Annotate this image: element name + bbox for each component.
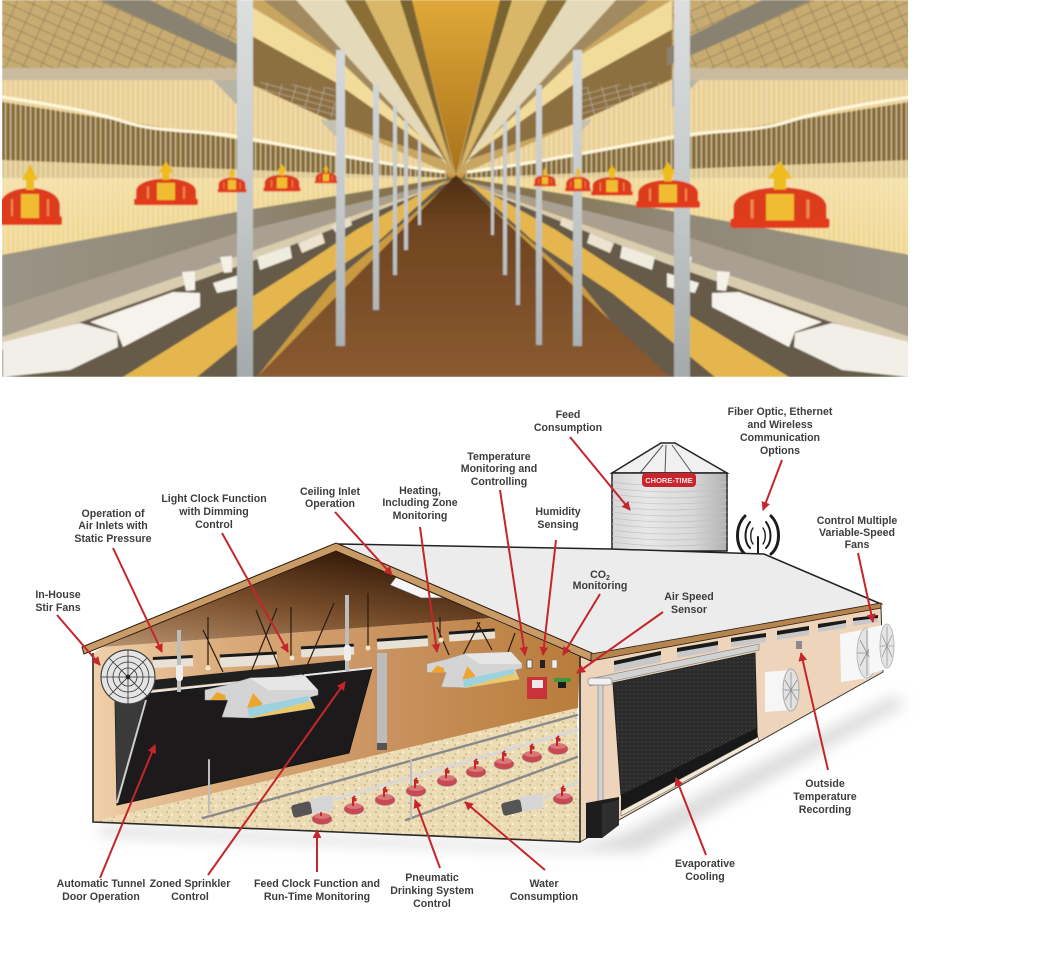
label: heating: Including Zone (382, 497, 458, 509)
label: ceiling inlet: Operation (305, 498, 355, 510)
photo: interior of poultry cage house (0, 0, 910, 377)
label: humidity sensing: Humidity (535, 506, 581, 518)
label: variable-speed fans: Variable-Speed (819, 527, 895, 539)
arrow: air speed (577, 612, 663, 673)
photo: left cage tiers (2, 0, 456, 377)
label: air inlets: Static Pressure (74, 533, 152, 545)
label: heating: Heating, (399, 485, 441, 497)
drinking and feed lines (203, 715, 577, 820)
label: heating: Monitoring (393, 510, 447, 522)
label: feed clock: Feed Clock Function and (254, 878, 380, 890)
evaporative cooling pad (613, 653, 757, 795)
arrow: evaporative cooling (676, 778, 706, 855)
arrow: outside temperature (801, 653, 828, 770)
label: CO2 monitoring: Monitoring (573, 580, 627, 592)
label: air inlets: Operation of (82, 508, 145, 520)
label: light clock: with Dimming (178, 506, 249, 518)
arrow: temperature (500, 490, 525, 655)
label: communication options: Fiber Optic, Ethernet (728, 406, 833, 418)
silo (612, 443, 727, 551)
arrow: zoned sprinkler (208, 682, 345, 875)
label: outside temperature: Outside (805, 778, 845, 790)
feed motor right (501, 793, 544, 816)
CO2 sensor module (554, 678, 571, 688)
label: pneumatic drinking: Control (413, 898, 451, 910)
arrow: pneumatic drinking (415, 800, 440, 868)
label: zoned sprinkler: Zoned Sprinkler (150, 878, 230, 890)
roof (338, 544, 881, 656)
back wall interior (93, 618, 580, 822)
arrow: communication (763, 460, 782, 510)
label: humidity sensing: Sensing (537, 519, 579, 531)
water box (586, 797, 619, 838)
label: pneumatic drinking: Drinking System (390, 885, 474, 897)
label: in-house stir fans: In-House (35, 589, 81, 601)
label: outside temperature: Temperature (793, 791, 857, 803)
silo logo: CHORE-TIME (645, 476, 693, 485)
arrow: tunnel door (100, 745, 155, 878)
arrow: humidity (543, 540, 556, 655)
label: ceiling inlet: Ceiling Inlet (300, 486, 360, 498)
house outlines (93, 653, 580, 842)
photo: brown floor aisle (257, 175, 670, 377)
arrow: ceiling inlet (335, 512, 392, 575)
arrow: heating (420, 527, 437, 652)
photo: red feeder pans (0, 161, 830, 228)
gable trim (82, 543, 592, 661)
curtain corner folds (115, 693, 146, 805)
tunnel door opening (115, 660, 372, 805)
icon: in-house stir fan (101, 650, 155, 704)
eave trim (591, 603, 881, 661)
label: communication options: Communication (740, 432, 820, 444)
label: light clock: Control (195, 519, 233, 531)
photo: vertical steel posts (237, 0, 690, 377)
label: CO2 monitoring: 2 (606, 575, 610, 582)
label: zoned sprinkler: Control (171, 891, 209, 903)
arrow: CO2 (563, 594, 600, 655)
label: temperature monitoring: Monitoring and (461, 463, 537, 475)
heater front (205, 676, 318, 718)
pad sill (621, 737, 759, 816)
photo: right cage tiers (456, 0, 910, 377)
label: feed clock: Run-Time Monitoring (264, 891, 370, 903)
tunnel fan far (868, 624, 894, 674)
label: CO2 monitoring: CO (590, 569, 606, 581)
tunnel fan large (840, 628, 877, 682)
label: feed consumption: Feed (556, 409, 580, 421)
label: variable-speed fans: Control Multiple (817, 515, 897, 527)
arrow: light clock (222, 533, 288, 652)
arrow: air inlets (113, 548, 162, 652)
arrow: in-house stir fans (57, 615, 100, 665)
icon: wireless antenna (738, 516, 778, 555)
label: communication options: Options (760, 445, 800, 457)
label: temperature monitoring: Controlling (471, 476, 527, 488)
back wall inlets (153, 628, 495, 668)
wall sensors (527, 660, 557, 668)
label: feed consumption: Consumption (534, 422, 602, 434)
attic ceiling (103, 549, 490, 647)
side wall exterior (580, 607, 894, 842)
label: outside temperature: Recording (799, 804, 851, 816)
label: variable-speed fans: Fans (845, 539, 869, 551)
label: tunnel door: Door Operation (62, 891, 140, 903)
arrow: variable-speed fans (858, 553, 873, 622)
label: tunnel door: Automatic Tunnel (57, 878, 145, 890)
label: water consumption: Water (529, 878, 559, 890)
arrow: feed consumption (570, 437, 630, 510)
ground shadow (100, 695, 905, 852)
label: air inlets: Air Inlets with (78, 520, 148, 532)
pad lower black strip (621, 728, 758, 811)
label: air speed sensor: Sensor (671, 604, 707, 616)
label: evaporative cooling: Cooling (685, 871, 725, 883)
outside temperature sensor (796, 641, 802, 649)
ceiling inlet (390, 577, 444, 598)
photo: ceiling corridor (412, 0, 500, 175)
label: light clock: Light Clock Function (161, 493, 267, 505)
label: evaporative cooling: Evaporative (675, 858, 735, 870)
arrow: water consumption (465, 802, 545, 870)
red controller box (527, 677, 547, 699)
tunnel fan small (765, 669, 799, 712)
floor litter (93, 708, 580, 842)
label: in-house stir fans: Stir Fans (35, 602, 81, 614)
stir pipes (176, 595, 351, 692)
label: temperature monitoring: Temperature (467, 451, 531, 463)
feed motor left (291, 795, 334, 818)
label: air speed sensor: Air Speed (664, 591, 714, 603)
label: communication options: and Wireless (747, 419, 813, 431)
label: pneumatic drinking: Pneumatic (405, 872, 459, 884)
hanging wires and lamps (203, 593, 515, 682)
label: water consumption: Consumption (510, 891, 578, 903)
arrow: feed clock (316, 830, 318, 872)
side wall inlets (614, 615, 878, 672)
sprinkler band (150, 660, 347, 690)
water pipe (588, 644, 759, 802)
feeder pans row (312, 736, 573, 824)
gas tube on wall (377, 653, 387, 750)
heater rear (427, 652, 522, 688)
